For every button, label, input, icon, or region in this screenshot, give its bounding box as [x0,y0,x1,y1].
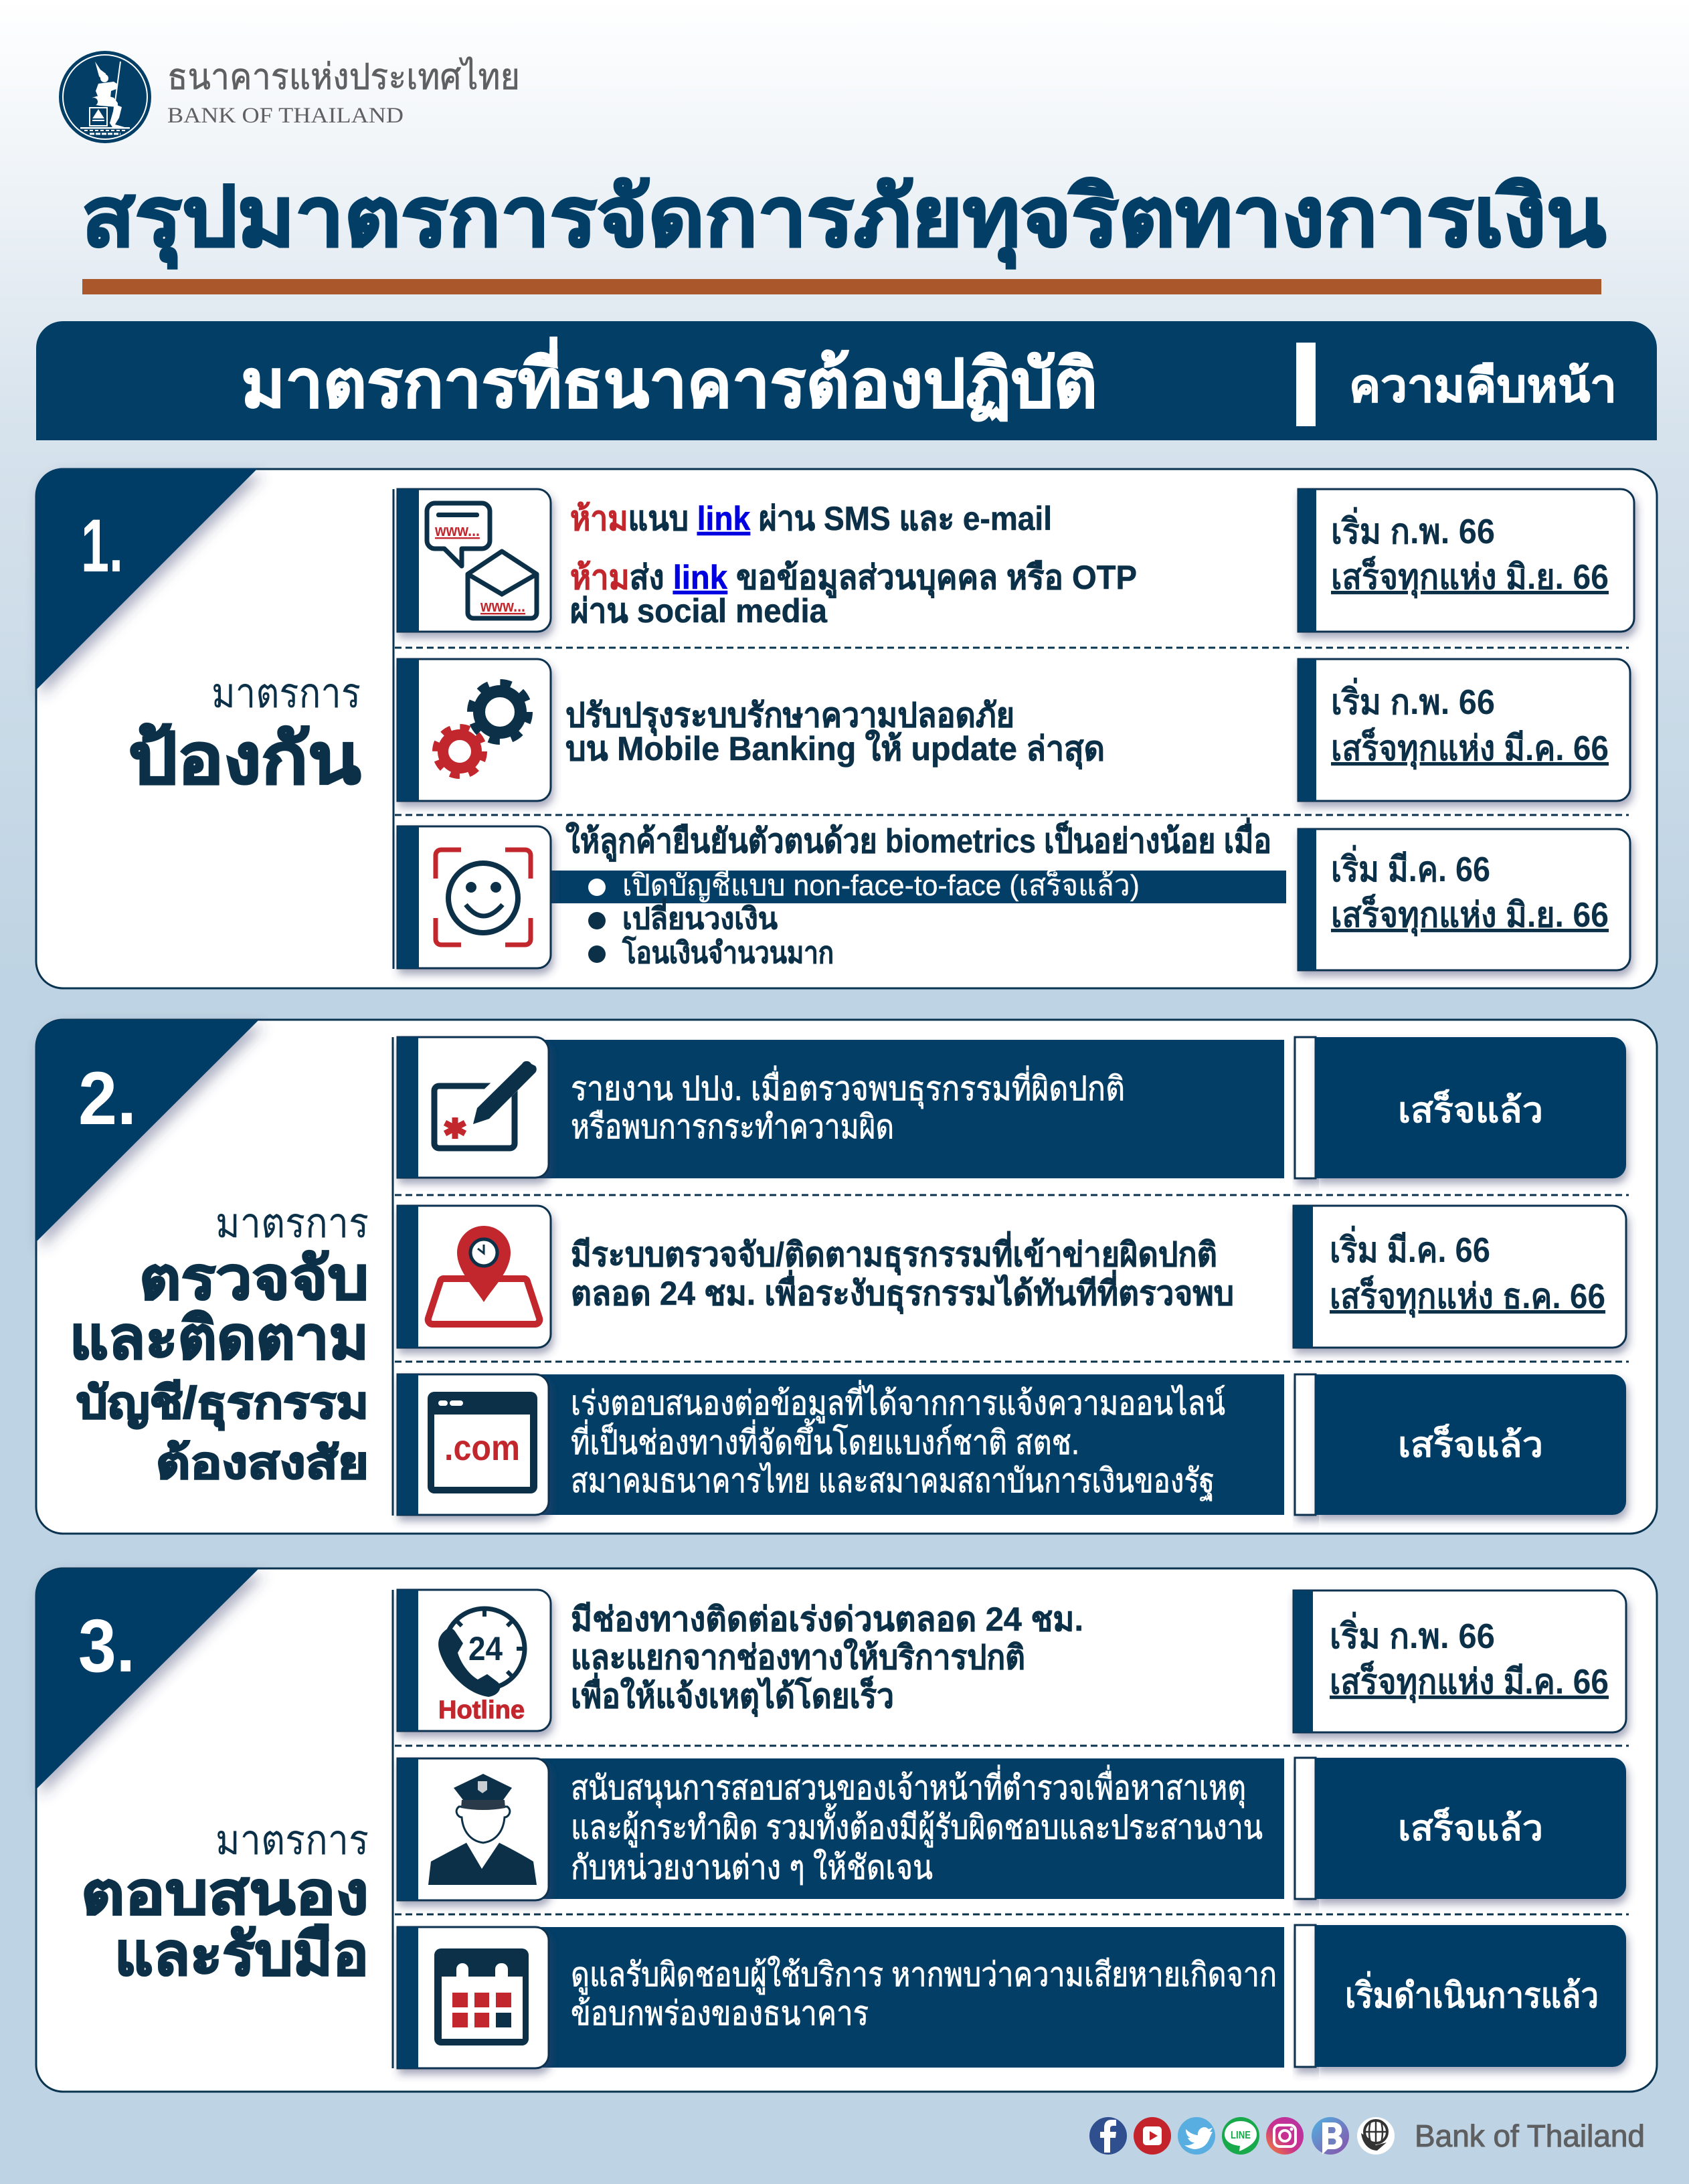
category heading 1: มาตรการ [211,670,361,717]
text: hotline [571,1601,1083,1717]
text: monitoring system [571,1231,1234,1314]
icon: twitter [1178,2117,1215,2155]
category heading 2: และติดตาม [70,1305,369,1371]
category heading 1 [128,670,361,798]
header bar [36,321,1657,440]
text: report to AMLO [571,1066,1125,1146]
progress card 2.2: เสร็จทุกแห่ง ธ.ค. 66 [1330,1275,1605,1318]
title: สรุปมาตรการจัดการภัยทุจริตทางการเงิน [82,171,1606,269]
text: biometrics [565,818,1271,970]
category heading 2: ตรวจจับ [139,1245,369,1311]
icon: line: LINE [1231,2130,1251,2141]
progress card 1.3 [1298,829,1630,970]
organisation name: ธนาคารแห่งประเทศไทย [167,56,520,97]
text: hotline: เพื่อให้แจ้งเหตุได้โดยเร็ว [571,1673,894,1717]
icon card: hotline: 24 [468,1630,503,1667]
progress card 1.1: เริ่ม ก.พ. 66 [1331,507,1495,551]
text: liability: ดูแลรับผิดชอบผู้ใช้บริการ หากพบว่าความเสียหายเกิดจาก [571,1956,1277,1995]
text: update security: บน Mobile Banking ให้ update ล่าสุด [565,729,1105,769]
icon: line [1222,2117,1259,2155]
status card 2.3: done [1295,1374,1626,1515]
title rule [82,279,1601,294]
category heading 3: มาตรการ [215,1817,369,1863]
text: hotline: และแยกจากช่องทางให้บริการปกติ [571,1638,1025,1676]
text: biometrics: เปลี่ยนวงเงิน [622,898,778,935]
text: update security [565,697,1105,769]
text: monitoring system: มีระบบตรวจจับ/ติดตามธุรกรรมที่เข้าข่ายผิดปกติ [571,1231,1217,1275]
category heading 2: มาตรการ [215,1200,369,1247]
text: support police [571,1765,1263,1886]
panel 2: detection [35,1020,1657,1534]
progress card 2.2 [1294,1206,1626,1348]
corner triangle 1 [35,468,258,691]
category heading 3: ตอบสนอง [81,1860,369,1926]
status card 3.3: started: เริ่มดำเนินการแล้ว [1345,1971,1599,2015]
text: support police: และผู้กระทำผิด รวมทั้งต้องมีผู้รับผิดชอบและประสานงาน [571,1803,1263,1847]
text: forbid links: ห้ามส่ง link ขอข้อมูลส่วนบุคคล หรือ OTP [570,559,1137,598]
icon: instagram [1266,2117,1304,2155]
corner triangle 3 [35,1568,259,1790]
status card 3.2: done: เสร็จแล้ว [1398,1807,1543,1848]
text: online report response [571,1380,1225,1501]
status card 2.1: done: เสร็จแล้ว [1398,1089,1543,1130]
icon card: dot com [397,1374,549,1515]
category heading 2 [70,1200,369,1487]
text: liability [571,1956,1277,2032]
text: liability: ข้อบกพร่องของธนาคาร [571,1995,869,2032]
category heading 2: ต้องสงสัย [156,1438,369,1487]
progress card 1.3: เริ่ม มี.ค. 66 [1331,845,1490,889]
status card 3.3: started [1295,1925,1626,2067]
logo: Bank of Thailand emblem [59,51,151,143]
organisation name [167,56,520,128]
text: report to AMLO: หรือพบการกระทำความผิด [571,1108,894,1146]
progress card 1.2 [1298,659,1630,801]
progress card 1.3: เสร็จทุกแห่ง มิ.ย. 66 [1331,894,1609,937]
progress card 2.2: เริ่ม มี.ค. 66 [1330,1226,1490,1270]
icon card: face scan [397,826,551,968]
footer name: Bank of Thailand [1415,2118,1645,2153]
text: biometrics: โอนเงินจำนวนมาก [622,935,834,970]
text: support police: สนับสนุนการสอบสวนของเจ้าหน้าที่ตำรวจเพื่อหาสาเหตุ [571,1765,1246,1808]
progress card 1.1: เสร็จทุกแห่ง มิ.ย. 66 [1331,556,1609,599]
text: support police: กับหน่วยงานต่าง ๆ ให้ชัดเจน [571,1849,933,1886]
icon card: link messages [397,489,551,632]
category heading 3 [81,1817,369,1987]
status card 2.3: done: เสร็จแล้ว [1398,1424,1543,1465]
highlight bar: completed item [551,871,1286,903]
icon card: link messages: www... [480,598,525,616]
icon card: location [397,1206,551,1348]
icon card: link messages: www... [434,522,480,540]
icon card: report [397,1037,549,1178]
icon card: hotline [397,1590,551,1731]
number 1: 1. [81,504,123,587]
progress card 1.2: เสร็จทุกแห่ง มี.ค. 66 [1331,727,1609,770]
progress card 3.1: เสร็จทุกแห่ง มี.ค. 66 [1330,1661,1609,1704]
corner triangle 2 [35,1020,259,1243]
icon: youtube [1134,2117,1171,2155]
text: online report response: เร่งตอบสนองต่อข้อมูลที่ได้จากการแจ้งความออนไลน์ [571,1380,1225,1423]
panel 3: response [35,1568,1657,2092]
icon: website [1357,2117,1395,2155]
text: hotline: มีช่องทางติดต่อเร่งด่วนตลอด 24 ชม. [571,1601,1083,1638]
icon card: gears [397,659,551,801]
text: monitoring system: ตลอด 24 ชม. เพื่อระงับธุรกรรมได้ทันทีที่ตรวจพบ [571,1270,1234,1314]
header: progress: ความคืบหน้า [1349,361,1617,412]
text: online report response: ที่เป็นช่องทางที่จัดขึ้นโดยแบงก์ชาติ สตช. [571,1419,1079,1461]
navy band 3.2 [535,1758,1284,1899]
navy band 2.3 [535,1374,1284,1515]
text: biometrics: เปิดบัญชีแบบ non-face-to-face (เสร็จแล้ว) [622,868,1140,902]
text: update security: ปรับปรุงระบบรักษาความปลอดภัย [565,697,1014,736]
social icons [1089,2117,1395,2155]
header: measures: มาตรการที่ธนาคารต้องปฏิบัติ [241,337,1097,422]
text: biometrics: ให้ลูกค้ายืนยันตัวตนด้วย biometrics เป็นอย่างน้อย เมื่อ [565,818,1271,862]
text: forbid links: ห้ามแนบ link ผ่าน SMS และ e-mail [570,500,1052,537]
progress card 3.1 [1294,1590,1626,1732]
text: forbid links [570,500,1137,630]
progress card 1.1 [1298,489,1634,632]
number 3: 3. [78,1604,135,1688]
status card 2.1: done [1295,1037,1626,1178]
progress card 3.1: เริ่ม ก.พ. 66 [1330,1612,1495,1656]
category heading 2: บัญชี/ธุรกรรม [76,1378,369,1431]
category heading 1: ป้องกัน [128,721,361,798]
text: forbid links: ผ่าน social media [570,592,828,630]
status card 3.2: done [1295,1758,1626,1899]
text: online report response: สมาคมธนาคารไทย และสมาคมสถาบันการเงินของรัฐ [571,1462,1215,1501]
icon card: hotline: Hotline [438,1696,525,1724]
number 2: 2. [78,1057,137,1140]
icon card: police [397,1758,549,1900]
navy band 3.3 [535,1927,1284,2068]
category heading 3: และรับมือ [114,1921,369,1987]
icon card: calendar [397,1927,549,2068]
text: report to AMLO: รายงาน ปปง. เมื่อตรวจพบธุรกรรมที่ผิดปกติ [571,1066,1125,1109]
icon card: dot com: .com [444,1428,520,1468]
progress card 1.2: เริ่ม ก.พ. 66 [1331,678,1495,722]
icon: facebook [1089,2117,1127,2155]
icon: blockdit [1312,2117,1349,2155]
panel 1: prevention [35,468,1657,988]
organisation name: BANK OF THAILAND [167,104,404,128]
navy band 2.1 [535,1040,1284,1178]
